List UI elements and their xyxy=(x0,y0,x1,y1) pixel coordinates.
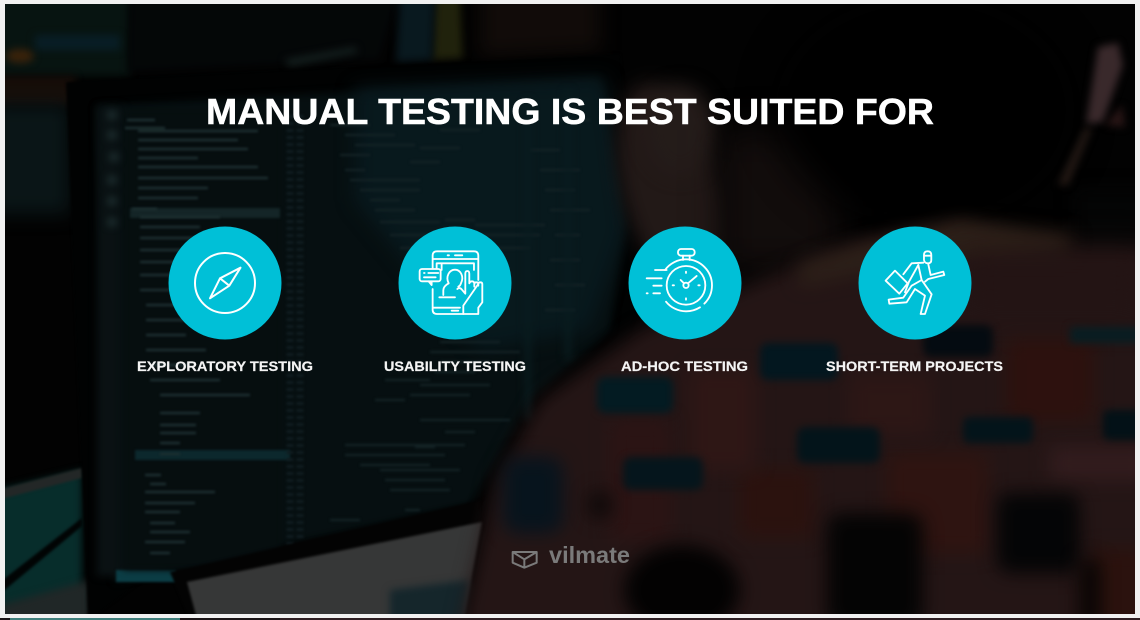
backdrop left of monitor xyxy=(0,0,600,214)
icon: logo mark xyxy=(513,552,537,568)
foreground laptop xyxy=(170,522,482,614)
next slide strip xyxy=(0,618,1140,620)
monitor screen xyxy=(66,54,640,620)
icon circle: stopwatch xyxy=(628,226,742,340)
label: SHORT-TERM PROJECTS xyxy=(826,358,1003,374)
person: hand and head xyxy=(612,40,1126,268)
item: usability testing xyxy=(384,226,526,374)
wordmark: vilmate xyxy=(549,542,630,568)
title: MANUAL TESTING IS BEST SUITED FOR xyxy=(206,91,934,132)
plaid shirt xyxy=(460,220,1140,620)
label: AD-HOC TESTING xyxy=(621,358,748,374)
item: exploratory testing xyxy=(137,226,313,374)
item: ad-hoc testing xyxy=(621,226,748,374)
label: EXPLORATORY TESTING xyxy=(137,358,313,374)
bottom-left teal desk xyxy=(5,467,88,614)
vilmate logo xyxy=(513,542,630,568)
icon circle: tablet with user and hand xyxy=(398,226,512,340)
icon circle: running businessman xyxy=(858,226,972,340)
item: short-term projects xyxy=(826,226,1003,374)
icon circle: compass xyxy=(168,226,282,340)
label: USABILITY TESTING xyxy=(384,358,526,374)
